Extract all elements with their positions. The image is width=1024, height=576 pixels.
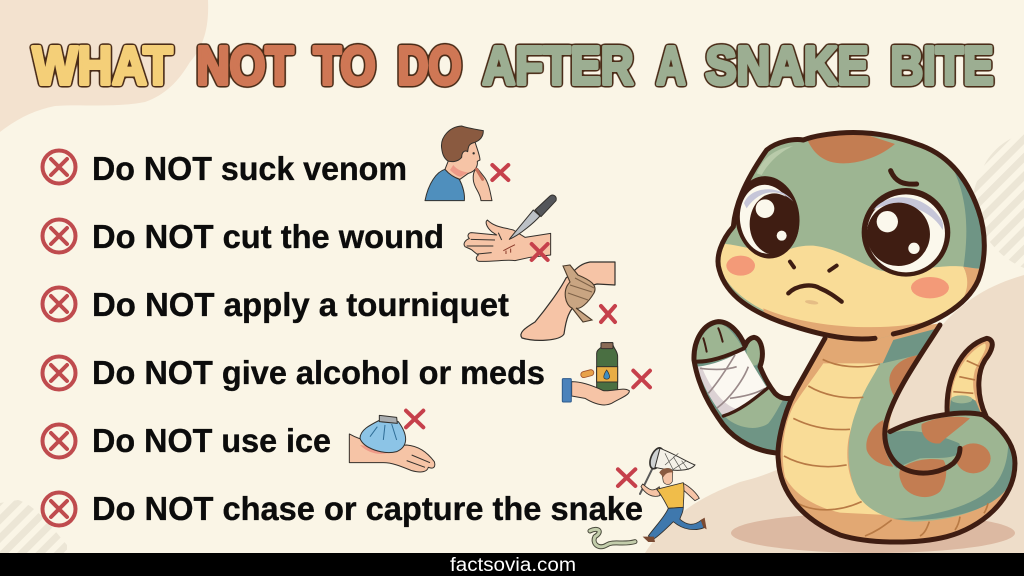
text: chase or capture: Do NOT chase or capture the snake bbox=[92, 490, 643, 527]
snake character bbox=[694, 127, 1015, 542]
icon: cross circle bbox=[42, 424, 76, 458]
icon: man sucking venom bbox=[425, 126, 508, 201]
text: cut the wound: Do NOT cut the wound bbox=[92, 218, 444, 255]
title: a: A bbox=[656, 36, 686, 96]
snake head bbox=[710, 127, 993, 347]
belly bbox=[783, 363, 887, 515]
footer text: factsovia.com bbox=[450, 555, 576, 576]
lip bbox=[805, 299, 819, 305]
belly lines bbox=[784, 359, 988, 536]
left eye bbox=[730, 172, 805, 263]
icon: hand with bottle and pills bbox=[562, 343, 650, 405]
icon: cross circle bbox=[42, 150, 76, 184]
coil hook outline bbox=[885, 325, 960, 473]
footer bar bbox=[0, 553, 1024, 576]
icon: cross circle bbox=[42, 492, 76, 526]
title bbox=[32, 36, 994, 96]
snake body bbox=[694, 322, 1015, 542]
head fills bbox=[720, 135, 982, 338]
nostrils bbox=[790, 262, 837, 271]
row 4 bbox=[42, 354, 545, 391]
body teal areas bbox=[883, 328, 1014, 520]
title: after: AFTER bbox=[482, 36, 634, 96]
icon: cross circle bbox=[42, 288, 76, 320]
text: tourniquet: Do NOT apply a tourniquet bbox=[92, 286, 509, 323]
body spots bbox=[866, 355, 970, 467]
stripes top right bbox=[973, 134, 1024, 268]
title: what: WHAT bbox=[32, 36, 173, 96]
head outline bbox=[718, 133, 984, 339]
body green bbox=[849, 355, 1015, 522]
row 3 bbox=[42, 286, 509, 323]
title: to: TO bbox=[314, 36, 376, 96]
mouth bbox=[788, 286, 842, 302]
body fill bbox=[778, 323, 1015, 542]
title: do: DO bbox=[398, 36, 462, 96]
spot lower bbox=[899, 459, 946, 497]
tail bbox=[947, 338, 992, 416]
title: not: NOT bbox=[196, 36, 294, 96]
icon: person chasing snake with net bbox=[618, 446, 707, 542]
corner blob top left bbox=[0, 0, 208, 132]
body outline bbox=[778, 338, 1015, 542]
brow bbox=[891, 171, 917, 184]
text: use ice: Do NOT use ice bbox=[92, 422, 331, 459]
icon: small snake bbox=[590, 529, 635, 547]
icon: hand and knife bbox=[464, 195, 556, 261]
icon: cross circle bbox=[42, 356, 76, 390]
icon: leg with tourniquet bbox=[521, 262, 615, 340]
row 1 bbox=[42, 150, 407, 187]
title: snake: SNAKE bbox=[706, 36, 868, 96]
arm with bandage bbox=[694, 322, 797, 453]
spot right bbox=[956, 443, 991, 473]
icon: ice pack on hand bbox=[349, 411, 435, 472]
row 2 bbox=[42, 218, 444, 255]
left cheek bbox=[726, 256, 755, 276]
icon: cross circle bbox=[42, 220, 76, 252]
right eye bbox=[862, 188, 950, 277]
title: bite: BITE bbox=[890, 36, 994, 96]
row 5 bbox=[42, 422, 331, 459]
row 6 bbox=[42, 490, 643, 527]
text: suck venom: Do NOT suck venom bbox=[92, 150, 407, 187]
floor blob bbox=[645, 275, 1024, 553]
ground shadow bbox=[731, 513, 1015, 553]
stripes bottom left bbox=[0, 500, 67, 553]
right cheek bbox=[911, 277, 949, 298]
text: alcohol or meds: Do NOT give alcohol or meds bbox=[92, 354, 545, 391]
